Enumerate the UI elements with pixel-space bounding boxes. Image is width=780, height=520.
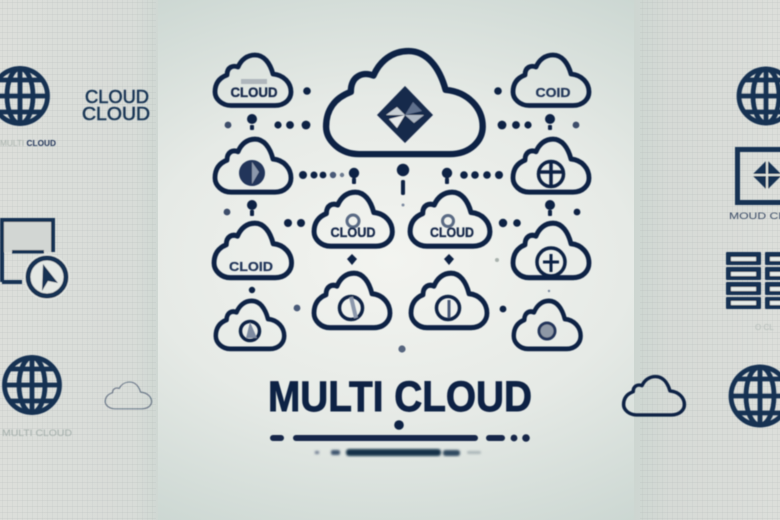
icon: main cloud [326, 51, 483, 154]
icon: globe top right [739, 69, 780, 123]
divider line [270, 434, 530, 442]
icon: monitor [738, 150, 780, 202]
cloud: bottom right [514, 301, 581, 349]
icon: faded cloud left [105, 382, 152, 409]
cloud: bottom centre right [411, 273, 487, 328]
icon [538, 161, 564, 187]
icon [347, 215, 359, 227]
icon [436, 296, 460, 320]
icon: diamond emblem [377, 86, 433, 143]
cloud: top left [215, 55, 291, 106]
icon: server racks [726, 252, 780, 309]
icon [539, 323, 555, 339]
label: CLOID [229, 259, 273, 274]
left text: cloud cloud [82, 87, 150, 124]
icon: cloud right [624, 377, 684, 415]
dot above divider [394, 420, 404, 430]
label: CLOUD [330, 225, 376, 240]
icon: globe bottom right [731, 367, 780, 425]
left text: cloud cloud: CLOUD [85, 87, 149, 107]
panel: left side [0, 0, 158, 520]
icon: document with cursor [2, 220, 70, 300]
icon [240, 322, 260, 340]
cloud: row 3 left [214, 223, 292, 278]
icon: globe bottom left [4, 357, 60, 413]
title: MULTI CLOUD [268, 373, 532, 421]
icon [537, 248, 565, 276]
faded caption: MULTI CLOUD [2, 428, 73, 438]
cloud: row 2 right [513, 139, 589, 192]
label: COID [536, 85, 570, 100]
faded server caption: O CL [755, 323, 774, 332]
connector dots [224, 87, 580, 353]
cloud: centre left label [314, 192, 392, 246]
monitor caption: MOUD CL [729, 211, 780, 222]
left text: cloud cloud: CLOUD [82, 104, 150, 124]
left caption: multi cloud: MULTI CLOUD [0, 139, 56, 148]
cloud: row 2 left [215, 139, 291, 192]
cloud: row 3 right [513, 223, 589, 278]
label: CLOUD [230, 85, 278, 100]
icon: globe top left [0, 68, 48, 124]
label: CLOUD [430, 225, 474, 240]
cloud: centre right label [410, 192, 490, 246]
icon [442, 216, 454, 226]
secondary divider [315, 449, 481, 456]
cloud: bottom left [216, 301, 284, 349]
panel: right side [634, 0, 780, 520]
icon [340, 296, 362, 320]
cloud: bottom centre left [314, 273, 390, 328]
faded label [241, 79, 267, 84]
icon [239, 160, 265, 186]
cloud: top right [513, 55, 589, 106]
